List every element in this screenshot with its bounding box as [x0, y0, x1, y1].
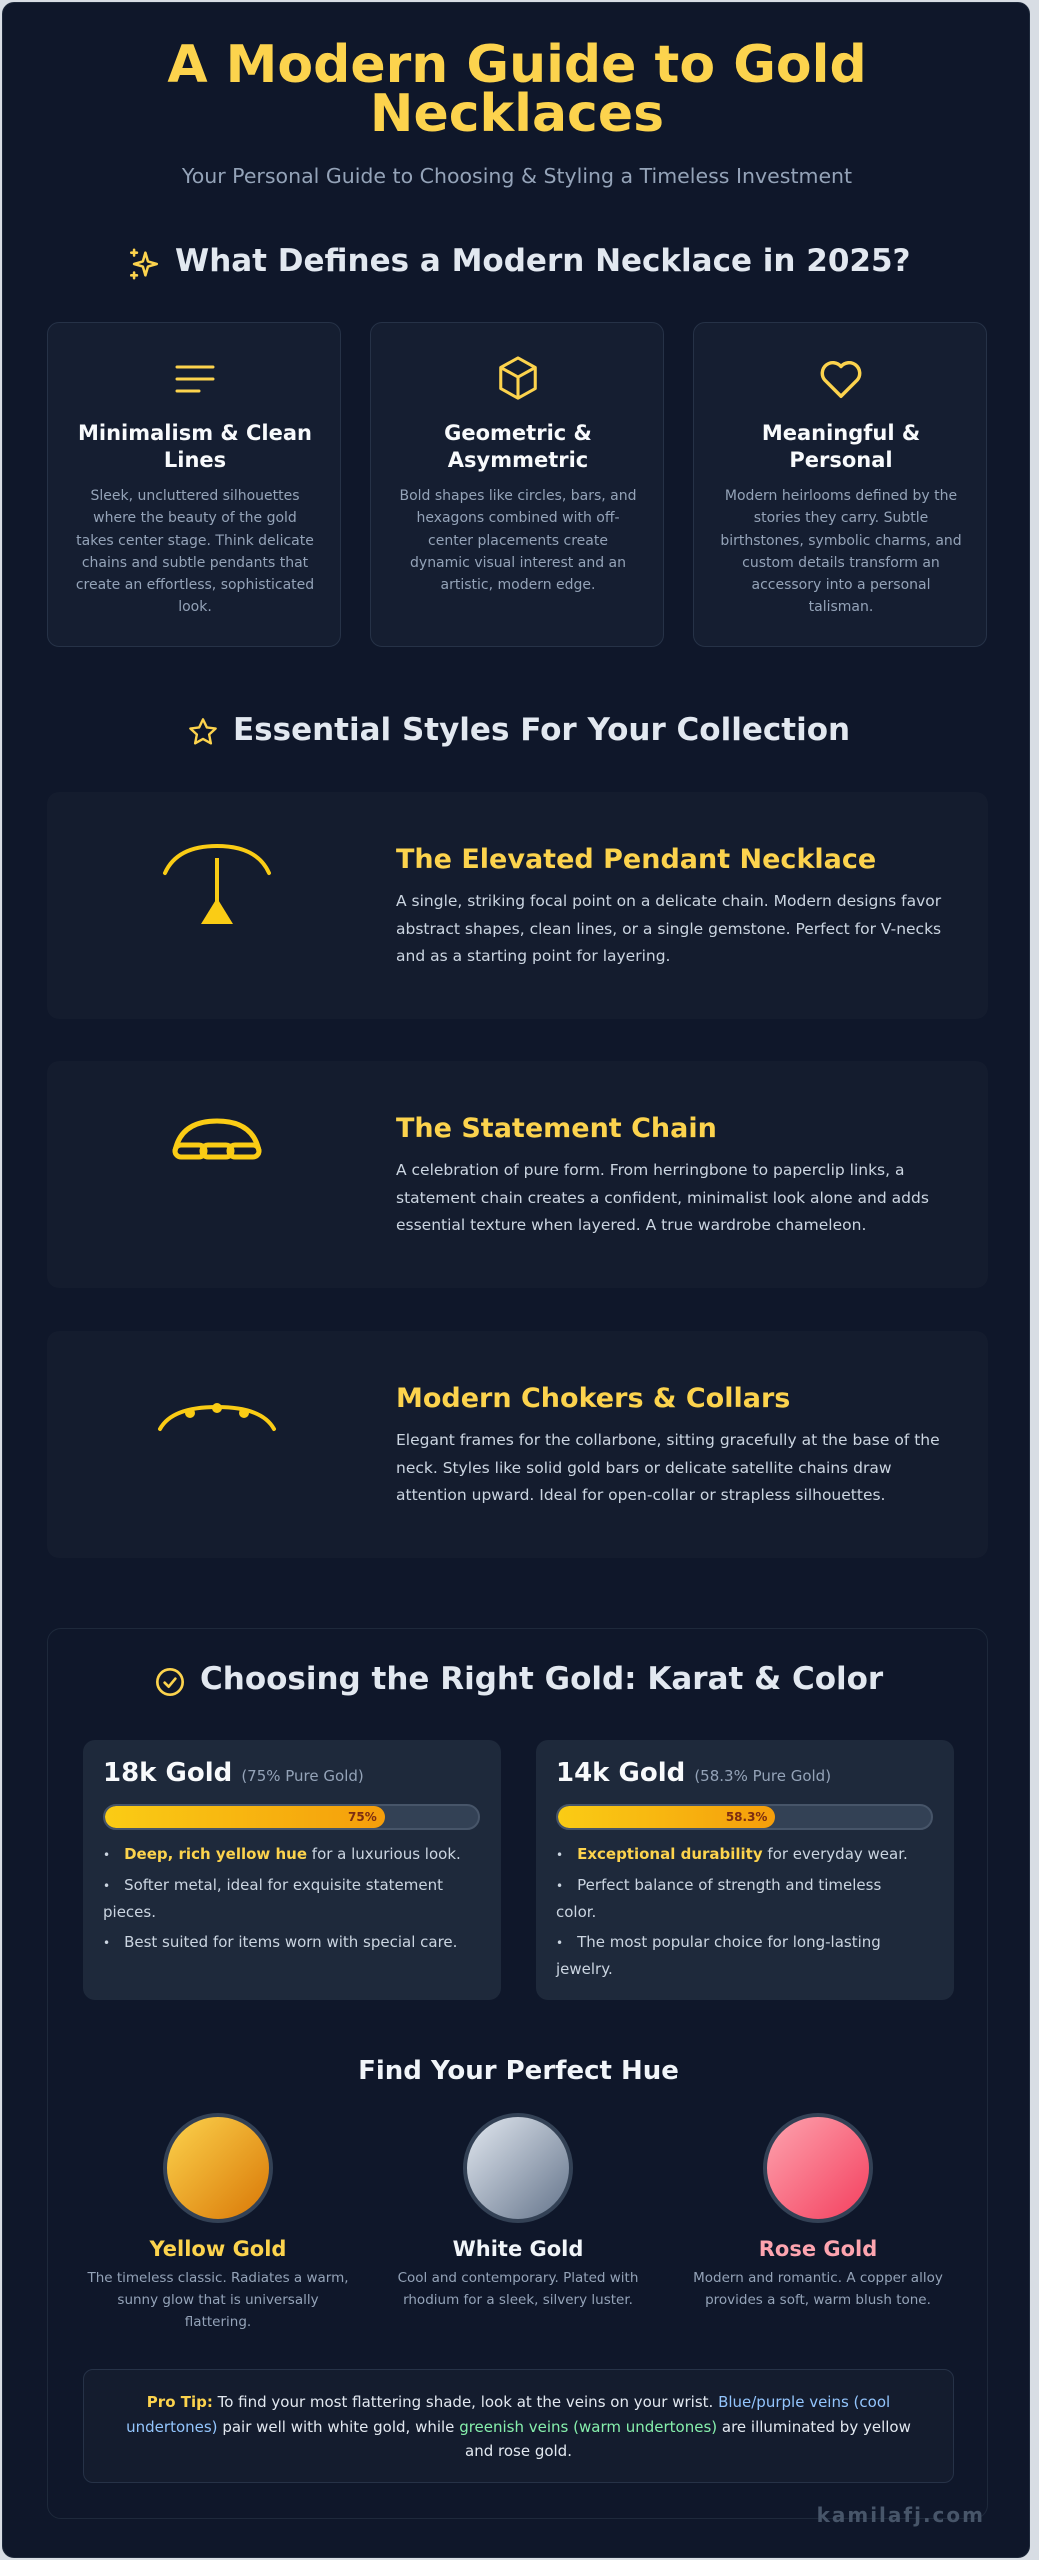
panel: statement chain: [47, 1061, 988, 1288]
panel: minimalism card: create an effortless, sophisticated: [76, 577, 314, 593]
panel: choosing gold: [47, 1628, 988, 2519]
panel: statement chain: A celebration of pure form. From herringbone to paperclip links, a statement chain creates a confident, minimalist look alone and adds essential texture when layered. A true wardrobe chameleon.: [396, 1161, 929, 1234]
icon: heart: [820, 361, 862, 398]
panel: pendant: The Elevated Pendant Necklace: [396, 844, 876, 875]
icon: lines: [176, 366, 214, 392]
panel: statement chain: The Statement Chain: [396, 1113, 717, 1144]
icon: cube: [499, 356, 537, 400]
panel: meaningful card: talisman.: [809, 599, 873, 615]
panel: meaningful card: accessory into a personal: [752, 577, 930, 593]
panel: geometric card: center placements create: [428, 533, 608, 549]
icon: check circle: [156, 1668, 184, 1696]
panel: minimalism card: look.: [178, 599, 212, 615]
bar: 58.3%: [556, 1804, 933, 1830]
title: [167, 35, 867, 144]
hue: rose: [693, 2113, 943, 2308]
panel: pendant: A single, striking focal point on a delicate chain. Modern designs favor abstract shapes, clean lines, or a single gemstone. Perfect for V-necks and as a starting point for layering.: [396, 892, 941, 965]
card: 14k: Perfect balance of strength and timeless color.: [556, 1876, 881, 1921]
heading: perfect hue: Find Your Perfect Hue: [358, 2056, 679, 2086]
callout: pro tip: [83, 2369, 954, 2483]
hue: white: Cool and contemporary. Plated with rhodium for a sleek, silvery luster.: [398, 2270, 638, 2308]
panel: meaningful card: Personal: [789, 448, 893, 472]
callout: pro tip: Pro Tip: To find your most flattering shade, look at the veins on your wrist. Blue/purple veins (cool undertones) pair well with white gold, while greenish veins (warm undertones) are illuminated by yellow and rose gold.: [126, 2393, 911, 2460]
hue: rose: Rose Gold: [759, 2237, 877, 2261]
panel: geometric card: [370, 322, 664, 647]
hue: white: [398, 2113, 638, 2308]
icon: choker: [158, 1403, 276, 1432]
panel: geometric card: dynamic visual interest and an: [410, 555, 626, 571]
panel: pendant: [47, 792, 988, 1019]
panel: minimalism card: takes center stage. Think delicate: [76, 533, 314, 549]
hue: yellow: [87, 2113, 349, 2330]
footer: site: kamilafj.com: [817, 2503, 985, 2527]
panel: chokers: Elegant frames for the collarbone, sitting gracefully at the base of the neck. Styles like solid gold bars or delicate satellite chains draw attention upward. Ideal for open-collar or strapless silhouettes.: [396, 1431, 940, 1504]
panel: geometric card: artistic, modern edge.: [440, 577, 595, 593]
hue: yellow: Yellow Gold: [150, 2237, 286, 2261]
title: Necklaces: [370, 84, 664, 144]
icon: chain: [172, 1118, 262, 1160]
panel: geometric card: Asymmetric: [448, 448, 588, 472]
hue: yellow: sunny glow that is universally: [117, 2292, 319, 2308]
heading: essential styles: Essential Styles For Your Collection: [233, 712, 850, 748]
panel: geometric card: Geometric &: [444, 421, 592, 445]
panel: meaningful card: Meaningful &: [762, 421, 920, 445]
card: 18k: 18k Gold (75% Pure Gold): [103, 1758, 364, 1788]
heading: what defines: What Defines a Modern Necklace in 2025?: [175, 243, 911, 279]
icon: sparkles: [130, 248, 158, 280]
panel: chokers: [47, 1331, 988, 1558]
panel: meaningful card: stories they carry. Subtle: [754, 510, 928, 526]
hue: white: White Gold: [453, 2237, 583, 2261]
card: 18k: Deep, rich yellow hue for a luxurious look.: [124, 1845, 461, 1863]
panel: meaningful card: birthstones, symbolic charms, and: [720, 533, 962, 549]
panel: minimalism card: Sleek, uncluttered silhouettes: [90, 488, 300, 504]
panel: choosing gold: flattering.: [185, 2314, 251, 2330]
icon: star: [189, 718, 217, 745]
subtitle: Your Personal Guide to Choosing & Styling a Timeless Investment: [182, 164, 852, 188]
card: 14k: Exceptional durability for everyday wear.: [577, 1845, 908, 1863]
card: 18k: Best suited for items worn with special care.: [124, 1933, 457, 1951]
panel: meaningful card: Modern heirlooms defined by the: [725, 488, 957, 504]
bar: 75%: 75%: [348, 1810, 377, 1824]
panel: meaningful card: custom details transform an: [742, 555, 940, 571]
heading: choosing gold: Choosing the Right Gold: Karat & Color: [200, 1661, 883, 1697]
panel: meaningful card: [693, 322, 987, 647]
panel: minimalism card: [47, 322, 341, 647]
card: 14k: 14k Gold (58.3% Pure Gold): [556, 1758, 831, 1788]
panel: minimalism card: Minimalism & Clean Lines: [78, 421, 312, 472]
panel: geometric card: hexagons combined with off-: [416, 510, 620, 526]
card: 14k: The most popular choice for long-lasting jewelry.: [556, 1933, 881, 1978]
icon: pendant: [162, 844, 272, 924]
card: 18k: Softer metal, ideal for exquisite statement pieces.: [103, 1876, 443, 1921]
card: 18k: [83, 1740, 501, 2000]
hue: rose: Modern and romantic. A copper alloy provides a soft, warm blush tone.: [693, 2270, 943, 2308]
hue: yellow: The timeless classic. Radiates a warm,: [87, 2270, 349, 2286]
panel: chokers: Modern Chokers & Collars: [396, 1383, 790, 1414]
bar: 75%: [103, 1804, 480, 1830]
bar: 58.3%: 58.3%: [726, 1810, 767, 1824]
card: 14k: [536, 1740, 954, 2000]
panel: minimalism card: chains and subtle pendants that: [82, 555, 308, 571]
title: A Modern Guide to Gold: [167, 35, 867, 95]
panel: minimalism card: where the beauty of the gold: [93, 510, 297, 526]
panel: geometric card: Bold shapes like circles, bars, and: [399, 488, 637, 504]
